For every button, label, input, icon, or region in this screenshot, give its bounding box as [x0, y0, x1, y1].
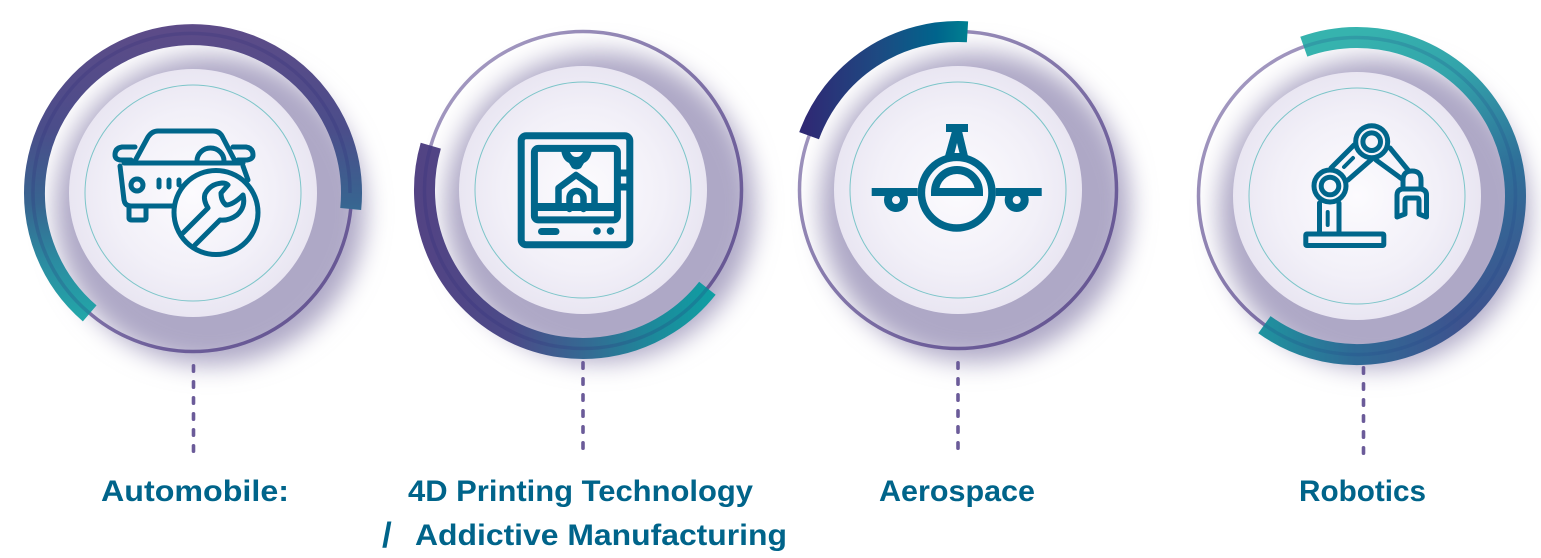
icon: robotic arm — [1306, 126, 1426, 246]
dotted connector: 4D printing — [581, 363, 585, 449]
panel: 4D printing — [424, 32, 755, 362]
gradient arc band — [809, 32, 968, 136]
heading: robotics: Robotics — [1299, 475, 1426, 508]
gradient arc band — [1264, 38, 1515, 355]
teal hairline circle — [85, 85, 301, 301]
dotted connector: aerospace — [956, 363, 960, 449]
teal hairline circle — [475, 82, 691, 298]
heading: addictive manufacturing: Addictive Manufacturing — [415, 519, 787, 552]
heading: 4D printing technology: 4D Printing Technology — [408, 475, 753, 508]
panel: robotics — [1198, 38, 1529, 368]
outer thin ring — [800, 32, 1116, 348]
soft shadow disc — [445, 52, 755, 362]
inner light disc — [1233, 72, 1481, 320]
panel: aerospace — [800, 32, 1130, 362]
inner light disc — [69, 69, 317, 317]
soft shadow disc — [820, 52, 1130, 362]
dotted connector: automobile — [192, 366, 195, 452]
heading: aerospace: Aerospace — [879, 475, 1035, 508]
panel: automobile — [33, 33, 365, 365]
heading: automobile: Automobile: — [101, 475, 289, 508]
inner light disc — [834, 66, 1082, 314]
icon: car with wrench — [115, 131, 258, 254]
teal hairline circle — [1249, 88, 1465, 304]
inner light disc — [459, 66, 707, 314]
outer thin ring — [1198, 38, 1516, 354]
soft shadow disc — [55, 55, 365, 365]
icon: 3D printer — [521, 136, 630, 245]
dotted connector: robotics — [1362, 368, 1365, 454]
gradient arc band — [34, 35, 351, 313]
icon: airplane — [872, 124, 1042, 228]
teal hairline circle — [850, 82, 1066, 298]
outer thin ring — [424, 32, 742, 348]
outer thin ring — [34, 34, 352, 352]
heading: slash: / — [382, 516, 392, 555]
soft shadow disc — [1219, 58, 1529, 368]
gradient arc band — [424, 146, 707, 349]
